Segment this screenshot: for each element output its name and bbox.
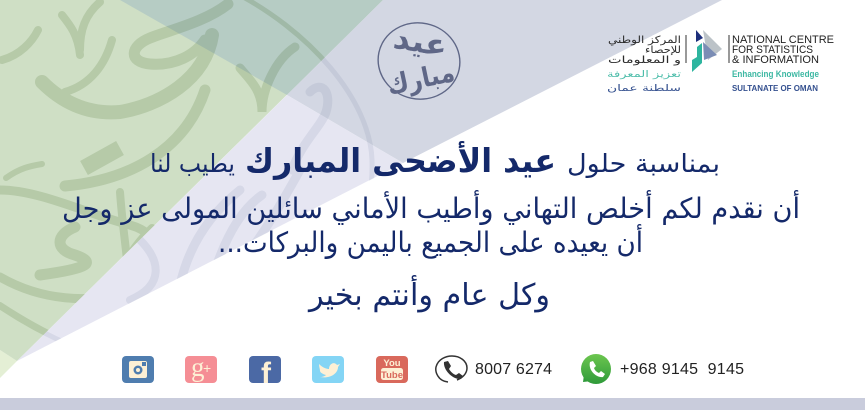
greeting message bbox=[62, 189, 800, 259]
icon: Instagram bbox=[122, 356, 154, 383]
greeting heading line: يطيب لنا bbox=[150, 149, 235, 178]
logo Arabic name: تعزيز المعرفة bbox=[607, 70, 682, 80]
icon: YouTube: You bbox=[383, 358, 401, 369]
greeting message: أن نقدم لكم أخلص التهاني وأطيب الأماني سائلين المولى عز وجل bbox=[62, 189, 800, 225]
icon: Google Plus: + bbox=[203, 360, 211, 376]
icon: Facebook: f bbox=[261, 357, 272, 390]
WhatsApp number: +968 9145 9145 bbox=[620, 361, 744, 378]
icon: Google Plus: g bbox=[191, 352, 204, 382]
greeting heading line bbox=[150, 140, 720, 180]
greeting message: أن يعيده على الجميع باليمن والبركات...‏ bbox=[218, 223, 643, 259]
phone number: 8007 6274 bbox=[475, 361, 552, 378]
logo English name: Enhancing Knowledge bbox=[732, 69, 819, 79]
logo English name bbox=[732, 34, 834, 93]
logo Arabic name bbox=[607, 35, 682, 94]
watermark: large decorative seal swashes on green bbox=[0, 0, 324, 335]
logo Arabic name: للإحصاء bbox=[645, 45, 681, 56]
logo Arabic name: سلطنة عمان bbox=[607, 84, 681, 94]
logo English name: & INFORMATION bbox=[732, 54, 819, 66]
icon: Google Plus bbox=[185, 352, 217, 383]
closing line: وكل عام وأنتم بخير bbox=[307, 274, 550, 313]
icon: WhatsApp bbox=[581, 354, 611, 384]
icon: YouTube: Tube bbox=[381, 370, 403, 381]
logo English name: NATIONAL CENTRE bbox=[732, 34, 834, 46]
logo mark bbox=[692, 30, 722, 72]
seal: Eid Mubarak calligraphy: عيد bbox=[391, 21, 450, 65]
seal: Eid Mubarak calligraphy bbox=[371, 15, 467, 107]
logo: National Centre for Statistics and Information bbox=[607, 30, 834, 94]
logo Arabic name: المركز الوطني bbox=[608, 35, 681, 46]
logo English name: SULTANATE OF OMAN bbox=[732, 83, 818, 93]
icon: YouTube bbox=[376, 356, 408, 383]
greeting heading line: عيد الأضحى المبارك bbox=[245, 140, 556, 180]
watermark: seal swashes continuing on lavender bbox=[44, 58, 374, 341]
logo divider lines bbox=[686, 35, 729, 63]
greeting heading line: بمناسبة حلول bbox=[567, 149, 720, 178]
logo Arabic name: و المعلومات bbox=[608, 55, 681, 66]
icon: Facebook bbox=[249, 356, 281, 390]
icon: Twitter bbox=[312, 356, 344, 383]
logo English name: FOR STATISTICS bbox=[732, 44, 813, 56]
icon: telephone bbox=[436, 356, 467, 382]
seal: Eid Mubarak calligraphy: مبارك bbox=[384, 57, 457, 101]
